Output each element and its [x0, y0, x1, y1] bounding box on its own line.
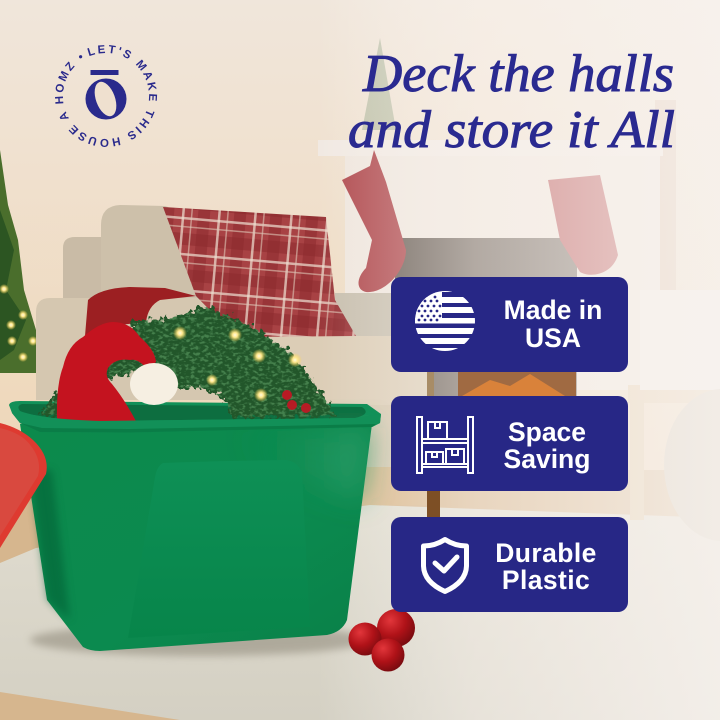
- label: space saving: Space: [508, 417, 586, 447]
- title: and store it All: [348, 101, 675, 159]
- berries: [282, 390, 311, 413]
- garland wreath: [40, 307, 336, 418]
- logo badge: [55, 45, 158, 147]
- floor shadow under bin: [30, 624, 370, 656]
- bin interior: [18, 404, 366, 421]
- title: Deck the halls: [362, 45, 674, 103]
- bin front panel: [128, 460, 310, 638]
- bin body: [20, 424, 372, 651]
- fireplace mantel: [318, 100, 676, 398]
- card: space saving: [391, 396, 628, 491]
- card: durable plastic: [391, 517, 628, 612]
- stocking: red: [342, 150, 406, 292]
- plaid pillow: [163, 207, 356, 337]
- red blanket: [85, 287, 196, 336]
- icon: american flag globe: [415, 290, 475, 352]
- label: made in usa: USA: [525, 323, 581, 353]
- wooden floor: [0, 470, 720, 720]
- christmas tree: [0, 150, 38, 373]
- bin rim back: [9, 401, 381, 432]
- icon: storage shelf: [417, 417, 473, 473]
- right side chair and pouf: [628, 290, 720, 541]
- title: [348, 45, 675, 159]
- card: made in USA: [391, 277, 628, 372]
- logo letter o: [86, 78, 126, 120]
- faint mantel tree: [362, 38, 396, 130]
- sofa leg: [427, 370, 440, 518]
- logo macron bar: [90, 70, 118, 75]
- sofa: [36, 205, 432, 505]
- stocking: faded: [548, 175, 618, 275]
- bin front rim: [12, 411, 381, 432]
- fairy lights: [173, 326, 302, 402]
- label: durable plastic: Durable: [495, 538, 597, 568]
- red lid: [0, 423, 47, 548]
- bin shadow at left: [30, 470, 70, 620]
- label: durable plastic: Plastic: [502, 565, 590, 595]
- label: space saving: Saving: [504, 444, 590, 474]
- label: made in usa: Made in: [504, 295, 602, 325]
- fireplace flames: [458, 372, 576, 398]
- green storage bin: [9, 307, 381, 651]
- logo ring text: LET'S MAKE THIS HOUSE A HOMZ •: [55, 45, 158, 147]
- christmas baubles: [348, 609, 415, 672]
- icon: shield with check: [424, 540, 466, 592]
- rug: [0, 505, 720, 720]
- santa hat: [57, 322, 178, 423]
